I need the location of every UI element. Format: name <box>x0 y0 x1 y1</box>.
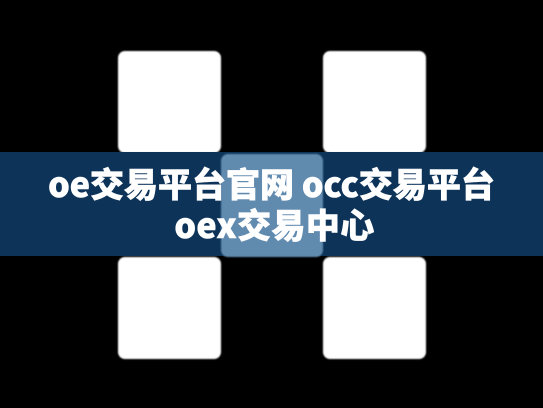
title <box>48 158 495 248</box>
icon tile: center <box>221 154 323 257</box>
icon tile: bottom right <box>323 257 426 359</box>
icon tile: bottom left <box>118 257 221 359</box>
title: oe交易平台官网 occ交易平台 <box>48 158 495 207</box>
title band <box>0 152 543 256</box>
icon tile: top right <box>323 51 426 153</box>
icon tile: top left <box>118 51 221 153</box>
title: oex交易中心 <box>174 199 375 248</box>
